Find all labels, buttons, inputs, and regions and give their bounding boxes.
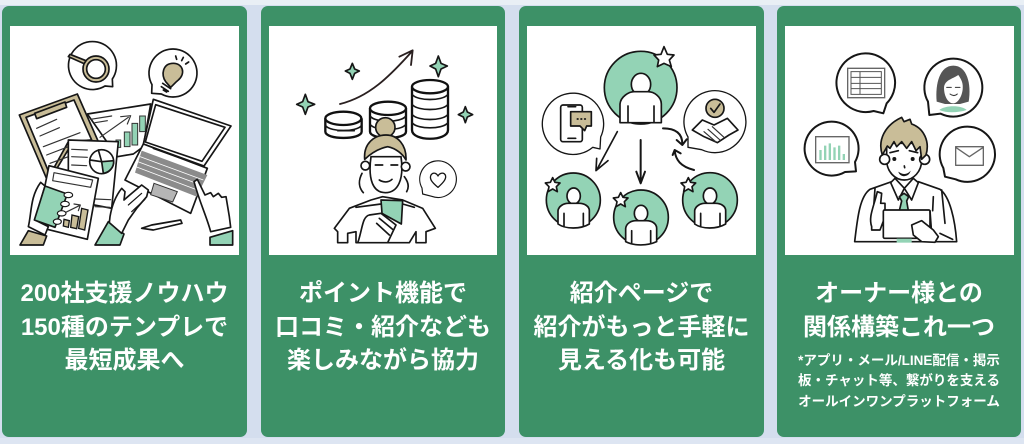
chart sheet behind [87, 104, 151, 157]
person bottom left [545, 173, 600, 228]
panel: referral page [519, 6, 764, 437]
heading [534, 280, 750, 374]
panel: point feature [261, 6, 505, 437]
pen [142, 220, 182, 230]
heading: 見える化も可能 [558, 347, 725, 374]
person bottom centre [613, 190, 668, 245]
illustration: referral network [527, 26, 756, 254]
icon: envelope bubble [940, 127, 995, 182]
heading [20, 280, 229, 374]
person bottom right [681, 173, 737, 228]
panel: templates and know-how [2, 6, 247, 437]
heading: 関係構築これ一つ [803, 314, 995, 340]
supporting note [798, 353, 1000, 409]
heading: 200社支援ノウハウ [20, 280, 229, 307]
illustration: woman with coins and smartphone [269, 26, 497, 254]
laptop [125, 99, 231, 213]
left hand with smartphone [20, 182, 73, 245]
heading [275, 280, 491, 374]
icon: chart bubble [805, 122, 859, 176]
man [855, 117, 957, 243]
supporting note: 板・チャット等、繋がりを支える [798, 373, 1000, 388]
heading: 楽しみながら協力 [287, 347, 479, 374]
heading [803, 280, 995, 340]
icon: heart bubble [420, 161, 456, 197]
arrows [596, 128, 694, 183]
bar chart document [37, 166, 98, 239]
sparkles [297, 56, 473, 123]
icon: light bulb bubble [149, 49, 197, 97]
woman [334, 118, 435, 243]
heading: ポイント機能で [299, 280, 467, 307]
icon: coffee cup bubble [68, 42, 116, 90]
icon: handshake bubble [684, 91, 746, 153]
pie chart document [68, 140, 118, 208]
clipboard [19, 94, 98, 183]
heading: 紹介ページで [570, 280, 713, 307]
heading: 紹介がもっと手軽に [534, 314, 750, 340]
supporting note: *アプリ・メール/LINE配信・掲示 [798, 353, 1000, 368]
growth arrow [340, 50, 413, 104]
illustration: man with tablet and bubbles [785, 26, 1014, 254]
heading: 口コミ・紹介なども [275, 314, 491, 340]
panel: owner relationship [777, 6, 1021, 437]
coin stacks [325, 80, 448, 139]
illustration: desk with documents and laptop [10, 26, 238, 254]
heading: オーナー様との [815, 280, 983, 307]
heading: 最短成果へ [64, 347, 184, 374]
centre hand [95, 185, 148, 245]
icon: woman bubble [924, 59, 982, 117]
icon: table bubble [836, 53, 895, 113]
supporting note: オールインワンプラットフォーム [798, 394, 1000, 409]
icon: phone message bubble [542, 93, 604, 154]
right hand on keyboard [194, 179, 233, 245]
main person with star [604, 47, 677, 124]
heading: 150種のテンプレで [21, 314, 228, 340]
